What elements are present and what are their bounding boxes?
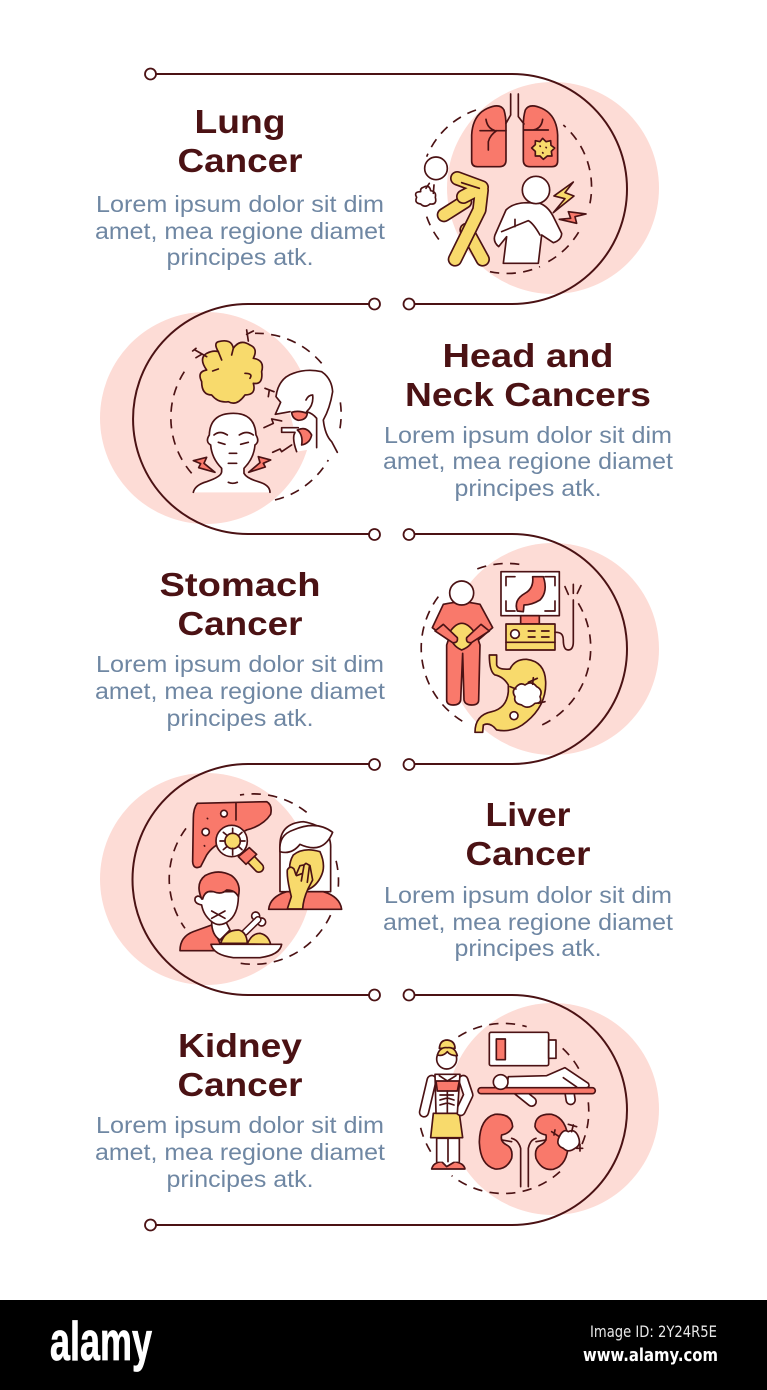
heading: Cancer (178, 142, 303, 179)
heading: Kidney (178, 1027, 303, 1064)
body text: Lorem ipsum dolor sit dim (384, 422, 672, 448)
panel: lung cancer (95, 68, 659, 310)
body text (95, 651, 385, 731)
background circle (447, 1003, 659, 1215)
heading: Lung (194, 103, 286, 140)
node end (145, 1220, 156, 1230)
icon: head and neck cancer symptoms (171, 330, 341, 500)
icon: lung cancer symptoms (416, 94, 592, 273)
body text: Lorem ipsum dolor sit dim (96, 651, 384, 677)
heading (178, 1027, 303, 1103)
node end (404, 298, 414, 310)
node start (369, 298, 380, 310)
body text: principes atk. (166, 1166, 314, 1192)
heading (160, 566, 320, 642)
connector line (414, 534, 627, 764)
background circle (100, 312, 312, 524)
node end (404, 759, 414, 770)
connector line (155, 74, 627, 304)
panel: head and neck cancers (100, 298, 673, 540)
heading: Head and (442, 337, 614, 374)
connector line (133, 304, 369, 534)
panel: kidney cancer (95, 990, 659, 1230)
heading: Neck Cancers (405, 376, 651, 413)
body text (95, 1112, 385, 1192)
body text (95, 191, 385, 270)
body text: Lorem ipsum dolor sit dim (96, 191, 384, 217)
heading: Liver (486, 796, 571, 833)
background circle (100, 773, 312, 985)
node end (369, 990, 380, 1000)
node end (369, 529, 380, 540)
body text: amet, mea regione diamet (95, 678, 385, 704)
footer bar (0, 1300, 767, 1390)
body text: amet, mea regione diamet (383, 909, 673, 935)
body text: principes atk. (454, 475, 602, 501)
body text (383, 422, 673, 501)
body text: principes atk. (166, 705, 314, 731)
heading (405, 337, 651, 413)
body text: Lorem ipsum dolor sit dim (384, 882, 672, 908)
heading: Cancer (466, 835, 591, 872)
body text: principes atk. (454, 935, 602, 961)
body text: principes atk. (166, 244, 314, 270)
panel: liver cancer (100, 759, 673, 1000)
node start (404, 990, 414, 1000)
body text: Lorem ipsum dolor sit dim (96, 1112, 384, 1138)
background circle (447, 543, 659, 755)
footer logo: alamy (50, 1310, 152, 1372)
heading (466, 796, 591, 872)
heading (178, 103, 303, 179)
icon: kidney cancer symptoms (420, 1023, 595, 1194)
icon: liver cancer symptoms (169, 794, 342, 964)
website: www.alamy.com (583, 1345, 718, 1366)
heading: Stomach (160, 566, 320, 603)
connector line (155, 995, 627, 1225)
body text: amet, mea regione diamet (95, 1139, 385, 1165)
node start (145, 68, 156, 80)
body text (383, 882, 673, 961)
image id: Image ID: 2Y24R5E (590, 1322, 717, 1341)
body text: amet, mea regione diamet (95, 218, 385, 244)
background circle (447, 82, 659, 294)
connector line (132, 764, 369, 995)
heading: Cancer (178, 605, 303, 642)
node start (404, 529, 414, 540)
node start (369, 759, 380, 770)
body text: amet, mea regione diamet (383, 448, 673, 474)
icon: stomach cancer symptoms (421, 563, 591, 732)
panel: stomach cancer (95, 529, 659, 770)
heading: Cancer (178, 1066, 303, 1103)
